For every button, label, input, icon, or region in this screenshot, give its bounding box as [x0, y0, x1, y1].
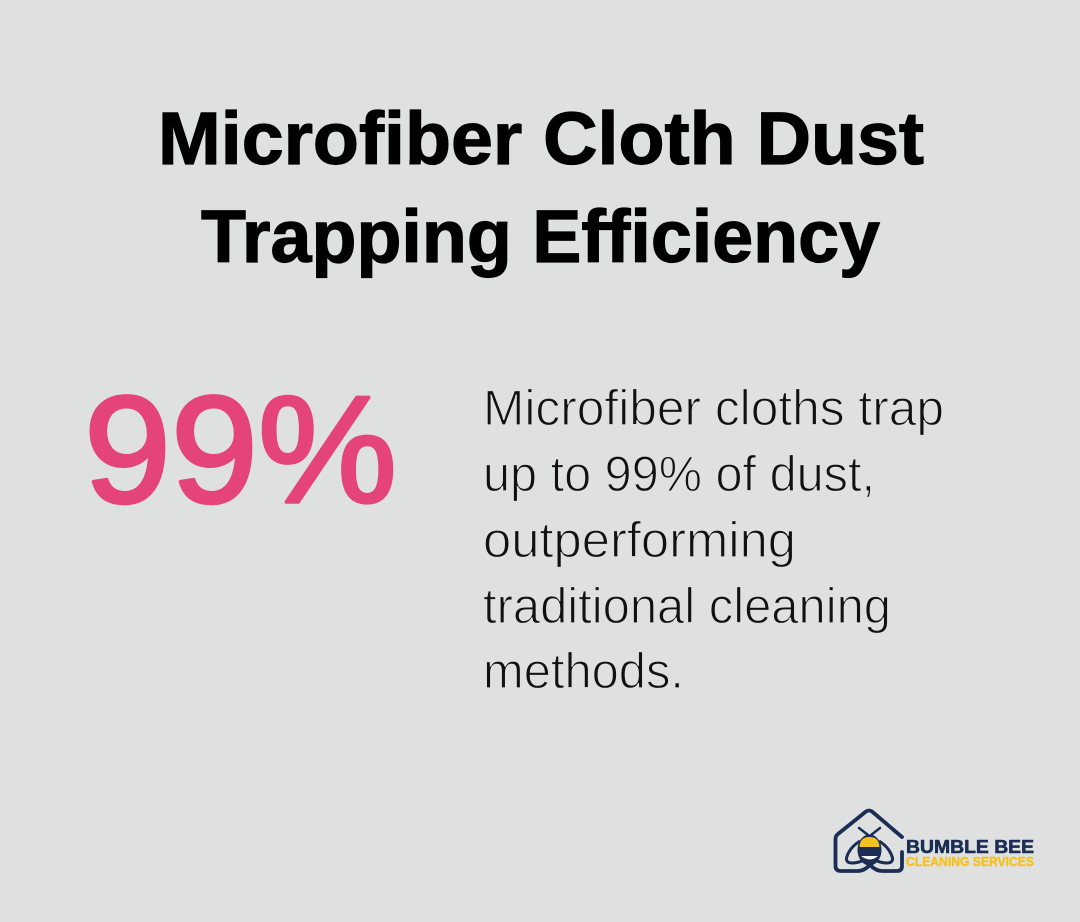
description text: up to 99% of dust,	[483, 446, 875, 502]
description text: Microfiber cloths trap	[483, 380, 944, 436]
logo: Bumble Bee Cleaning Services	[836, 810, 1034, 871]
big statistic: 99%: 99%	[84, 365, 397, 535]
description text	[483, 380, 944, 699]
description text: traditional cleaning	[483, 578, 891, 634]
logo tagline: CLEANING SERVICES	[906, 855, 1034, 869]
description text: outperforming	[483, 512, 796, 568]
title	[158, 97, 924, 278]
description text: methods.	[483, 643, 684, 699]
title: Microfiber Cloth Dust	[158, 97, 924, 180]
logo wordmark: BUMBLE BEE	[906, 836, 1034, 857]
title: Trapping Efficiency	[201, 195, 880, 278]
icon: house outline with bee	[836, 810, 902, 871]
